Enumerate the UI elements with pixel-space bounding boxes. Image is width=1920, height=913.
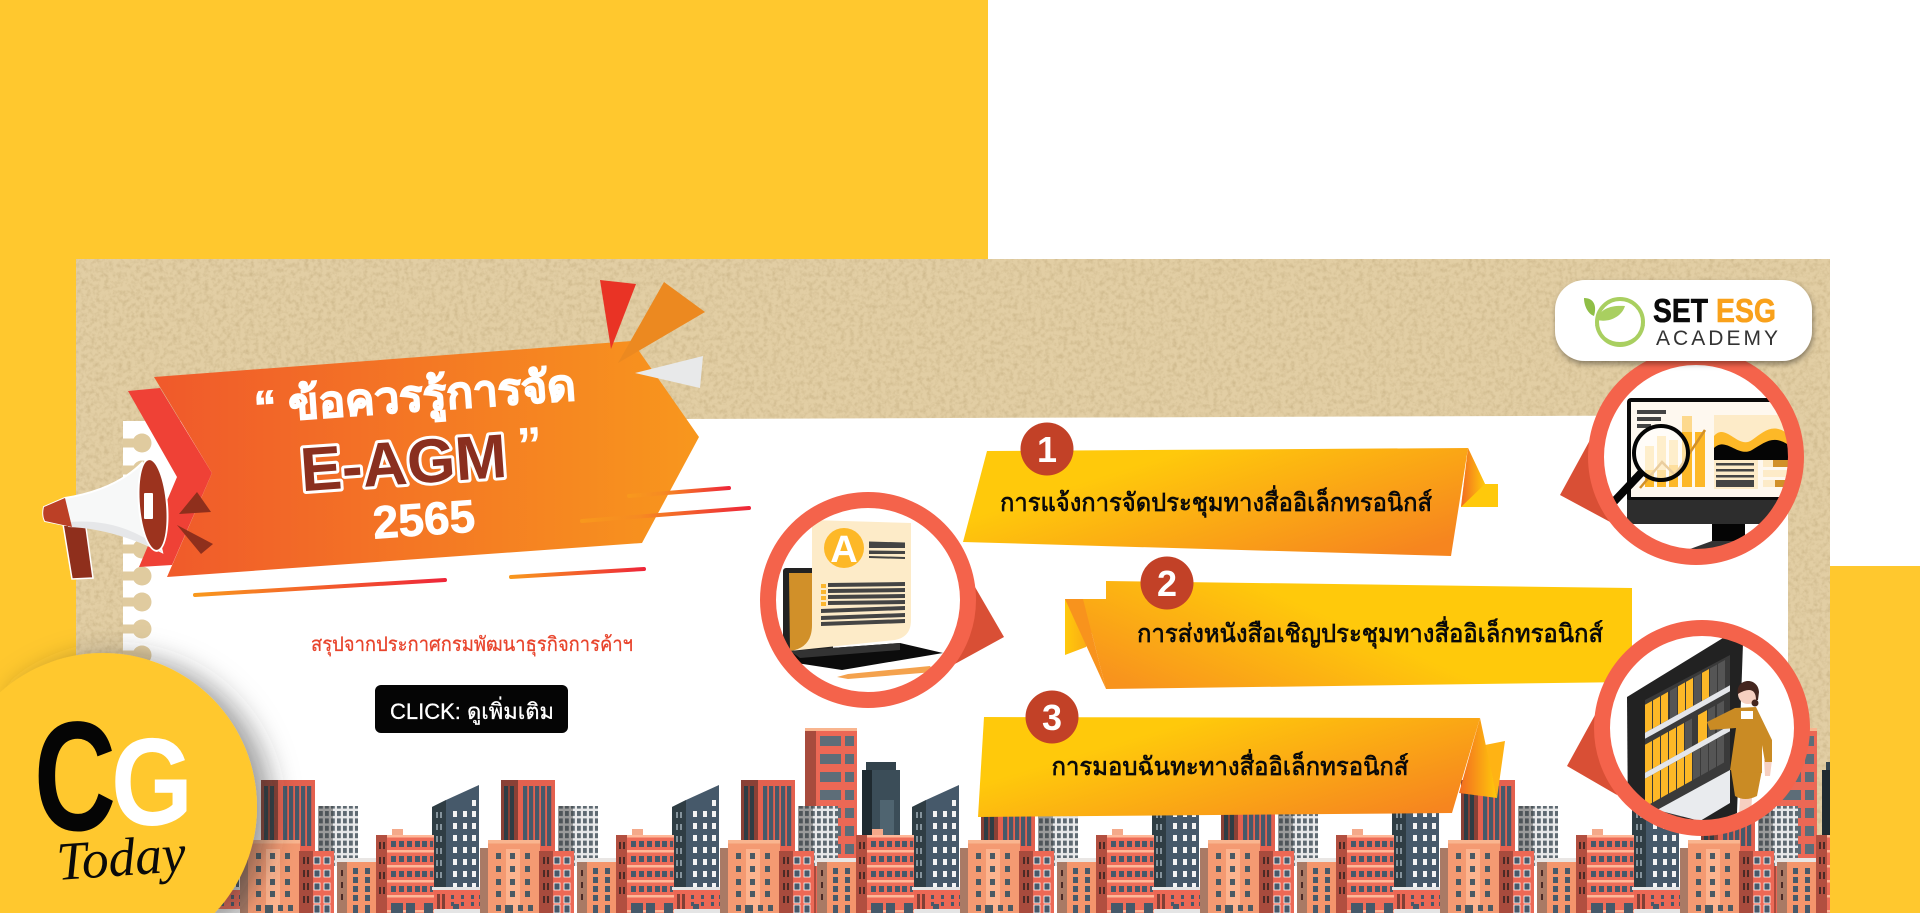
red high-rise and dark glass towers <box>805 728 1860 913</box>
CG Today badge: Today <box>55 823 188 892</box>
badge 3 <box>1026 690 1078 744</box>
button: click for more: CLICK: ดูเพิ่มเติม <box>390 696 554 725</box>
CG Today badge: G <box>111 714 193 852</box>
badge 2: 2 <box>1157 563 1177 604</box>
logo: SET ESG Academy: SET <box>1653 292 1708 329</box>
ribbon 1 label: การแจ้งการจัดประชุมทางสื่ออิเล็กทรอนิกส์ <box>1000 485 1432 518</box>
back banner: red <box>128 388 212 567</box>
accent triangles <box>600 280 705 388</box>
woman <box>1707 681 1772 812</box>
background: yellow top-left block <box>0 0 988 913</box>
icon circle: document on laptop: A <box>830 529 858 571</box>
title line 3: year: 2565 <box>371 490 477 549</box>
ribbon 3 label: การมอบฉันทะทางสื่ออิเล็กทรอนิกส์ <box>1052 749 1408 781</box>
icon: megaphone <box>43 457 213 579</box>
closing quote: ” <box>515 416 544 474</box>
icon circle: document on laptop <box>768 500 1004 700</box>
red accent lines <box>195 488 749 595</box>
notebook binding holes <box>123 434 152 664</box>
repeating skyline tiles <box>215 780 1830 913</box>
logo: SET ESG Academy: ACADEMY <box>1656 327 1778 350</box>
logo mark <box>1584 298 1644 345</box>
icon circle: digital filing cabinet <box>1567 628 1802 830</box>
ribbon 2 <box>1065 556 1632 689</box>
button: click for more <box>375 685 568 733</box>
icon circle: analytics monitor <box>1560 357 1807 557</box>
badge 3: 3 <box>1042 697 1062 738</box>
main banner: orange with title <box>154 341 699 577</box>
ribbon 2 label: การส่งหนังสือเชิญประชุมทางสื่ออิเล็กทรอนิกส์ <box>1137 616 1603 649</box>
logo: SET ESG Academy: ESG <box>1716 292 1776 329</box>
background: yellow right block <box>1830 566 1920 913</box>
badge 1 <box>1020 422 1074 476</box>
logo: SET ESG Academy <box>1555 280 1812 361</box>
binders and shelves <box>1645 657 1730 807</box>
white notebook sheet <box>123 415 1788 913</box>
title line 2: E-AGM: E-AGM <box>298 422 509 505</box>
CG Today badge: C <box>34 690 116 864</box>
ribbon 1 <box>963 422 1498 556</box>
kraft paper panel <box>76 259 1830 913</box>
ribbon 3 <box>978 690 1505 817</box>
badge 1: 1 <box>1037 429 1057 470</box>
title line 1: “ ข้อควรรู้การจัด <box>253 361 577 434</box>
CG Today badge <box>0 653 257 913</box>
city skyline <box>0 728 1920 913</box>
source note: สรุปจากประกาศกรมพัฒนาธุรกิจการค้าฯ <box>311 634 633 657</box>
badge 2 <box>1140 556 1194 610</box>
